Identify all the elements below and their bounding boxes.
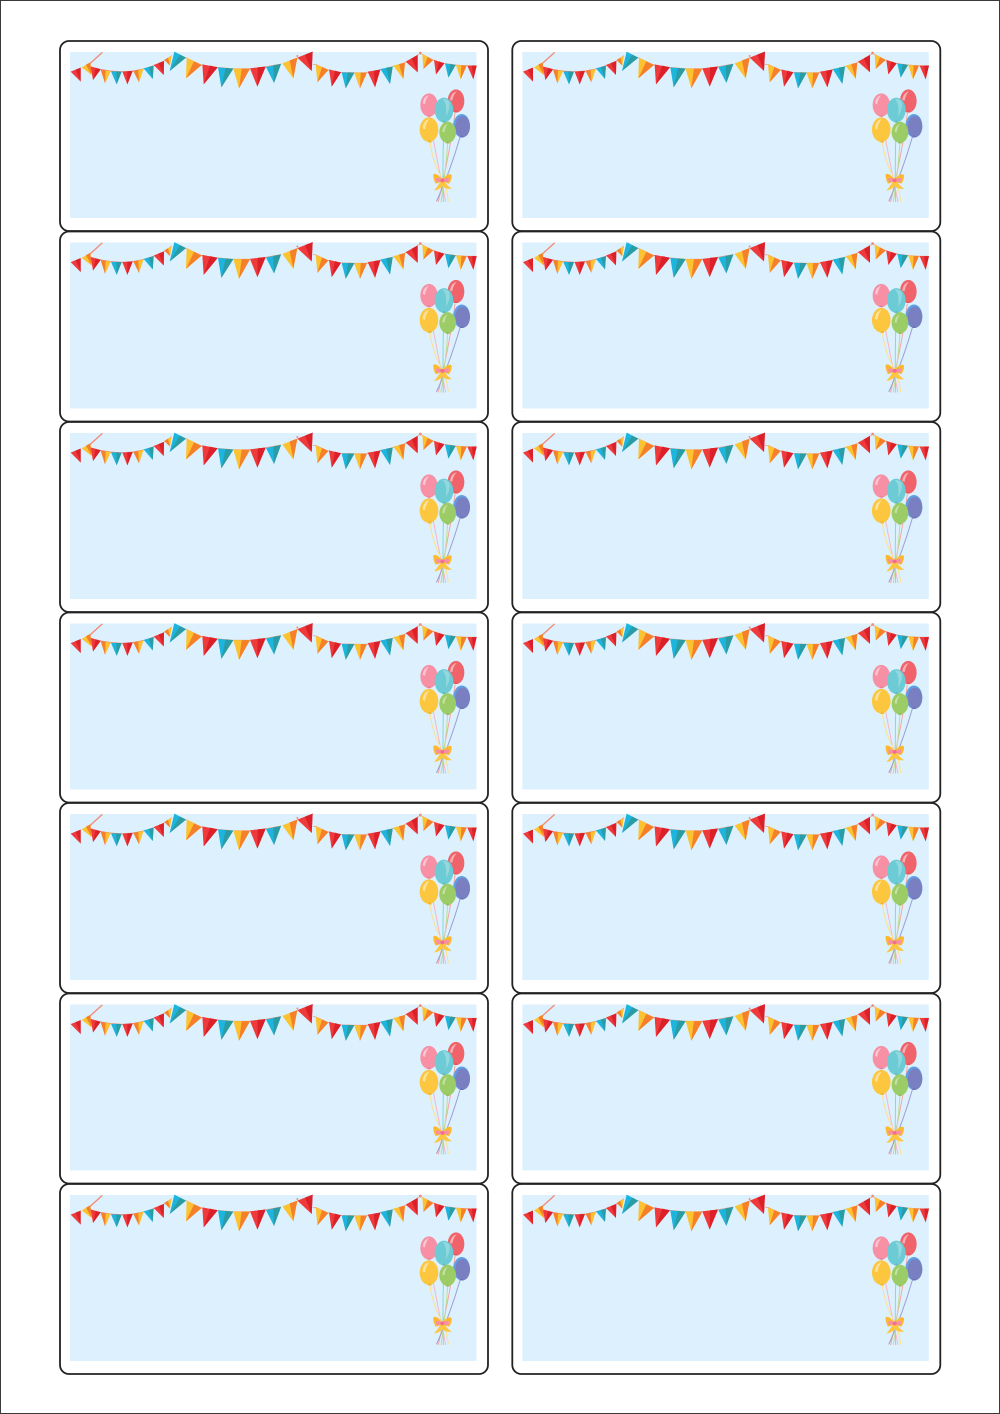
bunting: [71, 1004, 477, 1041]
card outline: [60, 41, 488, 231]
balloons: [420, 1232, 470, 1345]
blue panel: [70, 433, 476, 599]
bunting: [71, 623, 477, 660]
blue panel: [522, 1195, 929, 1361]
bunting: [71, 52, 477, 88]
label card: column 1 row 4: [60, 612, 488, 802]
bunting: [71, 1195, 477, 1231]
bunting: [523, 814, 929, 850]
balloons: [872, 89, 922, 202]
blue panel: [70, 624, 476, 790]
balloons: [420, 661, 470, 773]
bunting: [523, 1195, 929, 1231]
blue panel: [522, 624, 929, 790]
card outline: [512, 41, 940, 231]
bunting: [71, 433, 477, 469]
card outline: [60, 994, 488, 1184]
blue panel: [70, 242, 476, 408]
blue panel: [522, 52, 929, 218]
blue panel: [70, 1195, 476, 1361]
card outline: [60, 612, 488, 802]
card outline: [512, 232, 940, 422]
label card: column 1 row 3: [60, 422, 488, 612]
blue panel: [522, 433, 929, 599]
label card: column 1 row 7: [60, 1184, 488, 1374]
balloons: [872, 280, 922, 392]
card outline: [60, 232, 488, 422]
balloons: [420, 89, 470, 202]
card outline: [512, 422, 940, 612]
card outline: [512, 994, 940, 1184]
balloons: [420, 470, 470, 583]
blue panel: [522, 1004, 929, 1170]
label card: column 1 row 2: [60, 232, 488, 422]
card outline: [512, 1184, 940, 1374]
balloons: [872, 851, 922, 964]
bunting: [71, 814, 477, 850]
blue panel: [70, 1004, 476, 1170]
label card: column 2 row 2: [512, 232, 940, 422]
card outline: [60, 1184, 488, 1374]
balloons: [872, 470, 922, 583]
balloons: [420, 1042, 470, 1154]
blue panel: [522, 814, 929, 980]
blue panel: [70, 52, 476, 218]
card outline: [60, 422, 488, 612]
bunting: [523, 242, 929, 279]
balloons: [872, 1042, 922, 1154]
card outline: [512, 803, 940, 993]
blue panel: [522, 242, 929, 408]
bunting: [523, 1004, 929, 1041]
label card: column 2 row 6: [512, 994, 940, 1184]
label card: column 2 row 1: [512, 41, 940, 231]
blue panel: [70, 814, 476, 980]
label card: column 1 row 5: [60, 803, 488, 993]
card outline: [512, 612, 940, 802]
balloons: [420, 280, 470, 392]
label card: column 1 row 1: [60, 41, 488, 231]
bunting: [523, 433, 929, 469]
label card: column 2 row 3: [512, 422, 940, 612]
label card: column 2 row 7: [512, 1184, 940, 1374]
balloons: [420, 851, 470, 964]
bunting: [523, 623, 929, 660]
label card: column 1 row 6: [60, 994, 488, 1184]
balloons: [872, 1232, 922, 1345]
bunting: [523, 52, 929, 88]
balloons: [872, 661, 922, 773]
bunting: [71, 242, 477, 279]
card outline: [60, 803, 488, 993]
label card: column 2 row 5: [512, 803, 940, 993]
label card: column 2 row 4: [512, 612, 940, 802]
